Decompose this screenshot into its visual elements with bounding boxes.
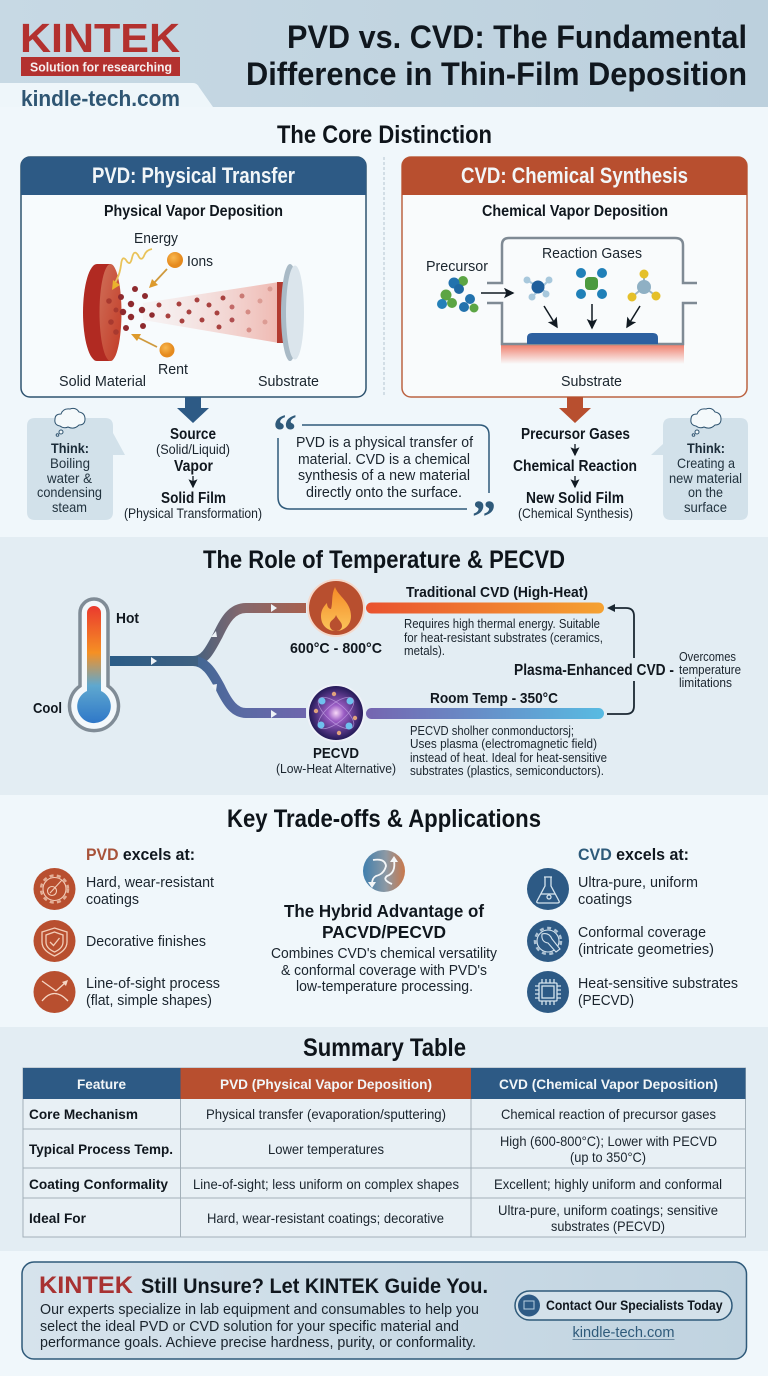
PVD flow: Source: [170, 426, 216, 443]
overcomes note: Overcomes: [679, 649, 736, 664]
quote text: synthesis of a new material: [298, 468, 470, 484]
CVD excels heading: CVD excels at:: [578, 846, 689, 864]
overcomes note: [679, 649, 741, 690]
table header: PVD (Physical Vapor Deposition): [220, 1076, 432, 1092]
flow markers: [151, 604, 277, 718]
text: ultra-pure: [578, 874, 698, 908]
footer heading: KINTEK: [39, 1272, 134, 1299]
think text: Think:: [687, 440, 725, 456]
text: heat sensitive: (PECVD): [578, 992, 634, 1009]
think text: Boiling: [50, 455, 90, 471]
temperature labels: Room Temp - 350°C: [430, 690, 558, 707]
icon: gear wrench: [34, 868, 76, 910]
low heat description: Uses plasma (electromagnetic field): [410, 736, 597, 751]
low heat description: substrates (plastics, semiconductors).: [410, 763, 604, 778]
icon: flame: [307, 579, 365, 637]
PVD header: PVD: Physical Transfer: [92, 163, 295, 188]
thermometer: [69, 599, 119, 731]
CVD flow: Precursor Gases: [521, 426, 630, 443]
CVD substrate bar: [527, 333, 658, 344]
PVD labels: Energy: [134, 230, 178, 247]
text: heat sensitive: Heat-sensitive substrates: [578, 975, 738, 992]
hybrid heading: PACVD/PECVD: [322, 922, 446, 942]
quote text: [296, 435, 474, 501]
text: line of sight: [86, 975, 220, 1009]
temperature labels: Traditional CVD (High-Heat): [406, 584, 588, 601]
CVD flow: [513, 426, 637, 521]
row: core mechanism: Physical transfer (evaporation/sputtering): [206, 1106, 446, 1122]
row: conformality: Line-of-sight; less uniform on complex shapes: [193, 1176, 459, 1192]
icon: line of sight: [34, 971, 76, 1013]
low heat description: instead of heat. Ideal for heat-sensitive: [410, 750, 607, 765]
PVD labels: [59, 230, 319, 390]
CVD labels: Reaction Gases: [542, 245, 642, 262]
CVD header: CVD: Chemical Synthesis: [461, 163, 688, 188]
icon: shield: [34, 920, 76, 962]
footer body: performance goals. Achieve precise hardness, purity, or conformality.: [40, 1334, 476, 1351]
CVD labels: Substrate: [561, 373, 622, 390]
row: core mechanism: Chemical reaction of precursor gases: [501, 1106, 716, 1122]
PVD flow: [124, 426, 262, 521]
CVD header: [402, 157, 747, 195]
pipe: upper branch: [193, 608, 306, 661]
reaction chamber: [487, 238, 697, 344]
quote text: PVD is a physical transfer of: [296, 435, 474, 451]
row: process temperature: Lower temperatures: [268, 1141, 384, 1157]
text: decorative: Decorative finishes: [86, 933, 206, 950]
molecule 2: [576, 268, 607, 299]
rent arrow: [131, 334, 157, 347]
PVD vapor cone: [143, 282, 279, 343]
hybrid text: Combines CVD's chemical versatility: [271, 946, 498, 962]
panel: PVD: [21, 157, 366, 397]
panel: temperature: [0, 537, 768, 795]
icon: hybrid: [363, 850, 405, 892]
ions arrow: [149, 269, 167, 288]
high heat description: Requires high thermal energy. Suitable: [404, 616, 600, 631]
high heat description: [404, 616, 603, 658]
footer body: Our experts specialize in lab equipment and consumables to help you: [40, 1301, 479, 1318]
pipe: trunk: [110, 656, 198, 666]
contact button: Contact Our Specialists Today: [546, 1298, 723, 1313]
energy wave arrow: [112, 249, 152, 290]
temperature labels: (Low-Heat Alternative): [276, 761, 396, 776]
PVD flow: (Solid/Liquid): [156, 441, 230, 457]
panel: CVD: [402, 157, 747, 397]
text: conformal: Conformal coverage: [578, 924, 706, 941]
title: [246, 19, 747, 92]
PVD excels heading: PVD excels at:: [86, 846, 195, 864]
heading: trade-offs: Key Trade-offs & Applications: [227, 805, 541, 833]
think text: water &: [46, 470, 93, 486]
PVD header: [21, 157, 366, 195]
text: conformal: (intricate geometries): [578, 941, 714, 958]
think text: on the: [688, 484, 723, 500]
panel: footer call to action: [22, 1262, 746, 1359]
hybrid text: & conformal coverage with PVD's: [281, 963, 487, 979]
PVD labels: Substrate: [258, 373, 319, 390]
rent ball: [160, 342, 174, 358]
table header: [77, 1076, 718, 1092]
bracket arrows: [607, 604, 634, 714]
header band: [0, 0, 768, 107]
deposition arrows: [544, 304, 640, 328]
row: process temperature: Typical Process Temp.: [29, 1141, 173, 1157]
CVD flow: Chemical Reaction: [513, 458, 637, 475]
CVD subtitle: Chemical Vapor Deposition: [482, 203, 668, 220]
row: core mechanism: [29, 1106, 716, 1122]
table header: Feature: [77, 1076, 126, 1092]
icon: chip: [527, 971, 569, 1013]
CVD flow: (Chemical Synthesis): [518, 505, 633, 521]
quote text: material. CVD is a chemical: [298, 452, 470, 468]
PVD labels: Rent: [158, 361, 189, 378]
logo: KINTEK: Solution for researching: [30, 60, 172, 74]
text: wear-resistant: [86, 874, 215, 908]
bar: low heat: [366, 708, 604, 719]
text: wear-resistant: Hard, wear-resistant: [86, 874, 215, 891]
footer body: select the ideal PVD or CVD solution for your specific material and: [40, 1318, 459, 1335]
CVD labels: [426, 245, 642, 390]
hybrid heading: The Hybrid Advantage of: [284, 901, 484, 921]
PVD labels: Ions: [187, 253, 213, 270]
PVD flow: Solid Film: [161, 490, 226, 507]
icon: flask: [527, 868, 569, 910]
row: ideal for: Hard, wear-resistant coatings; decorative: [207, 1210, 444, 1226]
logo: KINTEK: KINTEK: [20, 15, 180, 61]
think text: Creating a: [677, 455, 735, 471]
icon: plasma: [307, 684, 365, 742]
text: line of sight: (flat, simple shapes): [86, 992, 212, 1009]
footer heading: [39, 1272, 488, 1299]
row: ideal for: [29, 1202, 718, 1234]
panel: summary table: [0, 1027, 768, 1251]
pipe: lower branch: [193, 661, 306, 713]
text: line of sight: Line-of-sight process: [86, 975, 220, 992]
precursor molecules: [437, 276, 478, 312]
PVD flow: (Physical Transformation): [124, 505, 262, 521]
think text: [37, 440, 102, 515]
ions ball: [167, 252, 183, 268]
text: wear-resistant: coatings: [86, 891, 139, 908]
thermometer labels: Cool: [33, 700, 62, 717]
bar: high heat: [366, 602, 604, 614]
temperature labels: 600°C - 800°C: [290, 640, 382, 657]
footer link: kindle-tech.com: [572, 1324, 674, 1341]
high heat description: metals).: [404, 643, 445, 658]
temperature labels: Plasma-Enhanced CVD -: [514, 662, 674, 679]
row: process temperature: (up to 350°C): [570, 1149, 646, 1165]
row: ideal for: Ideal For: [29, 1210, 87, 1226]
text: ultra-pure: Ultra-pure, uniform: [578, 874, 698, 891]
quote text: directly onto the surface.: [306, 485, 462, 501]
heat zone: [501, 345, 684, 364]
icon: thought cloud right: [691, 408, 721, 436]
title: PVD vs. CVD: The Fundamental: [287, 19, 747, 55]
callout: think right: [651, 408, 748, 520]
row: conformality: Coating Conformality: [29, 1176, 168, 1192]
icon: thought cloud left: [55, 408, 85, 436]
overcomes note: temperature: [679, 662, 741, 677]
heading: core distinction: The Core Distinction: [277, 121, 492, 149]
closing quote mark: ”: [472, 491, 496, 544]
footer body: [40, 1301, 479, 1351]
low heat description: PECVD sholher conmonductorsj;: [410, 723, 574, 738]
text: ultra-pure: coatings: [578, 891, 632, 908]
molecule 1: [524, 276, 552, 300]
text: conformal: [578, 924, 714, 958]
CVD flow: New Solid Film: [526, 490, 624, 507]
row: ideal for: Ultra-pure, uniform coatings; sensitive: [498, 1202, 718, 1218]
PVD subtitle: Physical Vapor Deposition: [104, 203, 283, 220]
divider: [383, 157, 385, 397]
think text: [669, 440, 742, 515]
heading: summary: Summary Table: [303, 1034, 466, 1062]
icon: gear and wrench: [527, 920, 569, 962]
think text: steam: [52, 499, 87, 515]
substrate disc: [277, 264, 304, 361]
think text: new material: [669, 470, 742, 486]
arrow: PVD down: [177, 397, 209, 423]
CVD labels: Precursor: [426, 258, 488, 275]
panel: trade-offs: [34, 805, 738, 1013]
PVD flow: Vapor: [174, 458, 213, 475]
hybrid text: [271, 946, 498, 995]
inlet arrow: [481, 292, 513, 294]
callout: quote: [273, 405, 496, 544]
hybrid heading: [284, 901, 484, 942]
temperature labels: [276, 584, 674, 776]
overcomes note: limitations: [679, 675, 732, 690]
low heat description: [410, 723, 607, 778]
row: process temperature: [29, 1133, 717, 1165]
heading: temperature: The Role of Temperature & PECVD: [203, 546, 565, 574]
footer heading: Still Unsure? Let KINTEK Guide You.: [141, 1275, 488, 1298]
hybrid text: low-temperature processing.: [296, 979, 473, 995]
row: core mechanism: Core Mechanism: [29, 1106, 138, 1122]
row: conformality: Excellent; highly uniform and conformal: [494, 1176, 722, 1192]
callout: think left: [27, 408, 125, 520]
row: process temperature: High (600-800°C); Lower with PECVD: [500, 1133, 717, 1149]
contact button: [515, 1291, 732, 1320]
title: Difference in Thin-Film Deposition: [246, 56, 747, 92]
think text: surface: [684, 499, 727, 515]
high heat description: for heat-resistant substrates (ceramics,: [404, 630, 603, 645]
table header: CVD (Chemical Vapor Deposition): [499, 1076, 718, 1092]
arrow: CVD down: [559, 397, 591, 423]
opening quote mark: “: [273, 405, 297, 458]
molecule 3: [628, 270, 660, 302]
row: conformality: [29, 1176, 722, 1192]
solid material target: [83, 264, 122, 361]
table grid: [23, 1068, 746, 1237]
PVD labels: Solid Material: [59, 373, 146, 390]
logo url: kindle-tech.com: [21, 86, 180, 111]
text: heat sensitive: [578, 975, 738, 1009]
thermometer labels: [33, 610, 139, 717]
think text: Think:: [51, 440, 89, 456]
row: ideal for: substrates (PECVD): [551, 1218, 665, 1234]
temperature labels: PECVD: [313, 745, 359, 762]
vapor particles: [106, 286, 272, 335]
thermometer labels: Hot: [116, 610, 139, 627]
think text: condensing: [37, 484, 102, 500]
